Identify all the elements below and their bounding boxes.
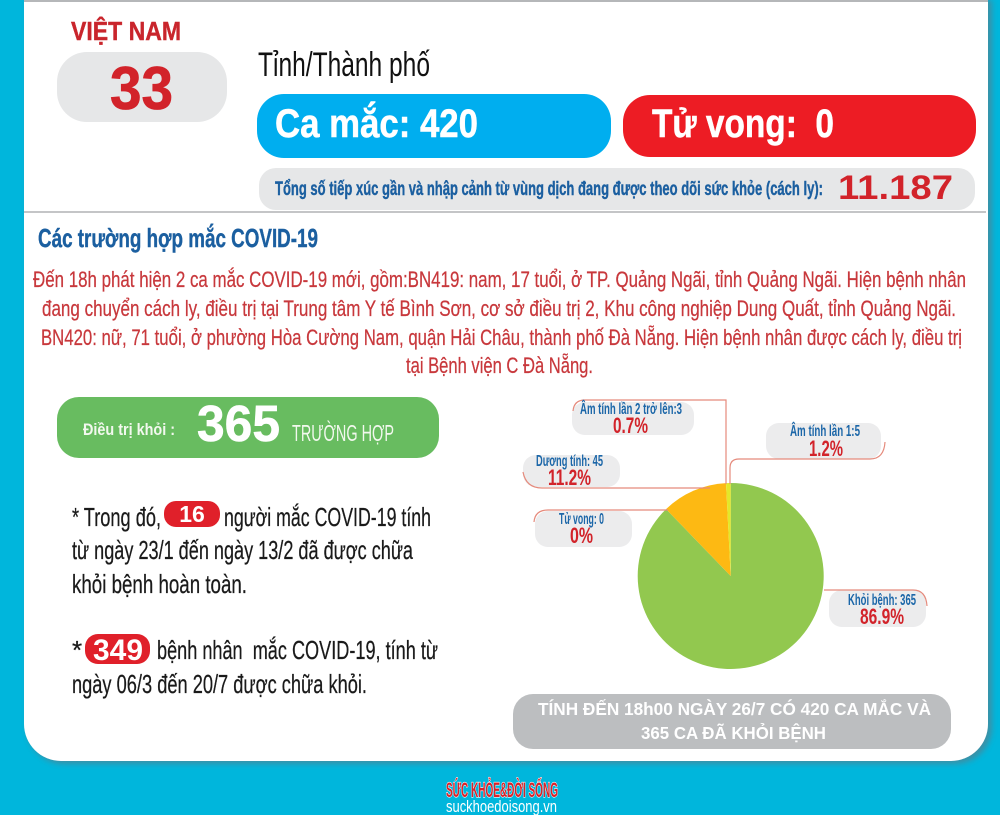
text block: 349 recovered patients: * [72, 635, 82, 665]
text block: 16 recovered patients: khỏi bệnh hoàn toàn. [72, 569, 247, 599]
badge: 16 [164, 501, 220, 527]
footer: publication logo [446, 778, 558, 815]
callout: summary as of 18h00 on 26/7: TÍNH ĐẾN 18h00 NGÀY 26/7 CÓ 420 CA MẮC VÀ [538, 698, 931, 719]
callout: recovered: 86.9% [860, 604, 904, 629]
badge: 349: 349 [93, 634, 143, 667]
text block: 16 recovered patients: từ ngày 23/1 đến ngày 13/2 đã được chữa [72, 535, 413, 565]
stat: contacts under monitoring [259, 168, 975, 210]
slice: negative once and twice [726, 483, 731, 576]
callout: positive: Dương tính: 45 [536, 453, 603, 470]
callout: summary as of 18h00 on 26/7: 365 CA ĐÃ KHỎI BỆNH [641, 722, 826, 743]
callout: negative twice or more: 0.7% [613, 413, 648, 438]
callout: recovered: Khỏi bệnh: 365 [848, 592, 916, 609]
number: 33 provinces: 33 [110, 55, 173, 122]
stat: cases: Ca mắc: 420 [275, 100, 478, 146]
slice: positive [666, 483, 731, 576]
stat: deaths [623, 95, 976, 157]
stat: recovered 365: TRƯỜNG HỢP [292, 420, 394, 446]
text: SỨC KHỎE&ĐỜI SỐNG [446, 778, 558, 802]
heading: COVID-19 cases: Các trường hợp mắc COVID-19 [38, 223, 318, 253]
callout: negative once: 1.2% [809, 436, 843, 461]
callout: summary as of 18h00 on 26/7 [513, 694, 951, 749]
callout: negative twice or more [572, 399, 726, 484]
callout: negative twice or more: Âm tính lần 2 trở lên:3 [580, 399, 682, 418]
callout: deaths: 0% [570, 523, 593, 548]
stat: recovered 365: 365 [197, 395, 280, 452]
panel: Vietnam province count [57, 16, 227, 122]
stat: deaths: Tử vong: 0 [652, 102, 834, 146]
callout: deaths: Tử vong: 0 [559, 511, 604, 528]
callout: negative once [730, 421, 885, 484]
heading: Việt Nam: VIỆT NAM [71, 16, 181, 46]
stat: recovered 365 [57, 395, 439, 458]
pill: gray background for 33 [57, 52, 227, 122]
stat: contacts under monitoring: 11.187 [838, 169, 953, 207]
slice: recovered [638, 483, 824, 669]
text block: 349 recovered patients [72, 634, 438, 699]
chart: pie of case status [523, 399, 927, 669]
badge: 16: 16 [179, 501, 205, 527]
text block: 16 recovered patients: người mắc COVID-19 tính [224, 502, 431, 532]
stat: recovered 365: Điều trị khỏi : [83, 420, 175, 439]
text block: 349 recovered patients: bệnh nhân mắc COVID-19, tính từ [157, 635, 438, 665]
callout: positive [523, 453, 710, 490]
callout: recovered [824, 590, 927, 629]
stat: cases [257, 94, 611, 158]
text block: 16 recovered patients: * Trong đó, [72, 502, 161, 532]
callout: deaths [534, 510, 668, 548]
callout: negative once: Âm tính lần 1:5 [790, 421, 860, 440]
label: Tỉnh/Thành phố: Tỉnh/Thành phố [258, 46, 430, 84]
text block: 16 recovered patients [72, 501, 431, 599]
text block: new cases description: tại Bệnh viện C Đà Nẵng. [406, 353, 593, 378]
text block: new cases description [33, 267, 966, 378]
callout: positive: 11.2% [548, 465, 591, 490]
text block: 349 recovered patients: ngày 06/3 đến 20/7 được chữa khỏi. [72, 669, 367, 699]
